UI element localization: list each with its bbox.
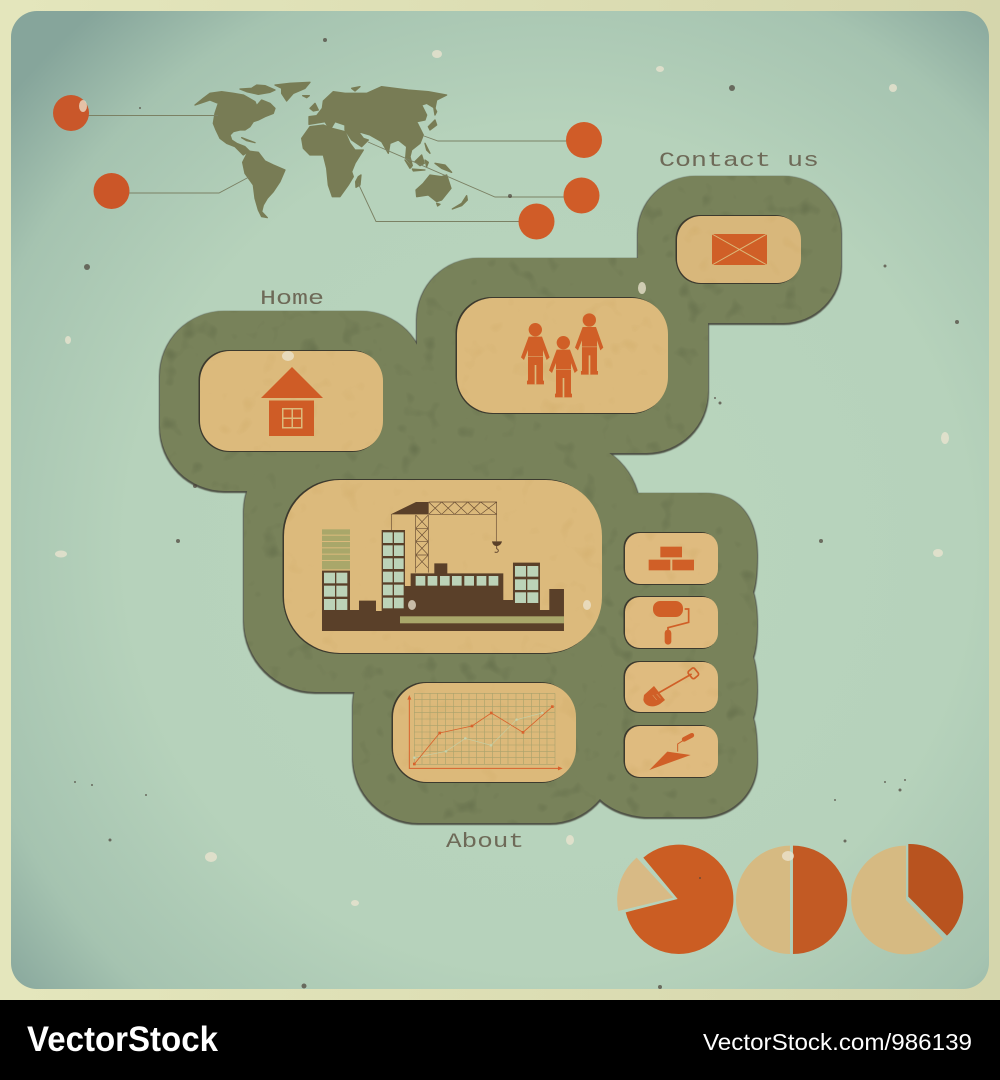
icon: trowel xyxy=(649,732,695,770)
panel: people xyxy=(457,298,668,413)
slice: cream xyxy=(617,858,673,911)
icon: paint roller xyxy=(653,601,689,645)
crane xyxy=(391,502,498,573)
slice: orange xyxy=(626,845,733,954)
map: Africa, Eurasia and Oceania xyxy=(302,87,467,209)
panel: trowel xyxy=(625,726,718,777)
icon: envelope xyxy=(712,234,767,265)
world map with callout markers xyxy=(53,82,602,239)
marker: Middle East xyxy=(564,178,600,214)
icon: bricks xyxy=(649,547,694,570)
watermark bar xyxy=(0,1000,1000,1080)
marker: East Asia xyxy=(566,122,602,158)
unfinished storeys xyxy=(322,529,350,569)
panel: paint roller xyxy=(625,597,718,648)
pie chart: one third xyxy=(851,844,963,954)
heading: About: About xyxy=(446,831,524,854)
secondary series xyxy=(413,712,543,759)
icon: shovel xyxy=(643,667,699,706)
panel: home xyxy=(200,351,383,451)
marker: North America xyxy=(53,95,89,131)
chart axes xyxy=(409,698,560,768)
watermark: image id: VectorStock.com/986139 xyxy=(703,1029,972,1055)
heading: Contact us: Contact us xyxy=(659,150,819,173)
dark specks xyxy=(74,38,959,989)
pie chart: half xyxy=(736,846,847,954)
icon: house xyxy=(261,367,323,436)
slice: orange xyxy=(793,846,847,954)
slice: cream xyxy=(736,846,790,954)
illustration: buildings and crane xyxy=(322,502,564,631)
primary series xyxy=(414,707,552,764)
marker: Madagascar xyxy=(518,204,554,240)
axis arrowheads xyxy=(407,695,563,770)
slice: orange xyxy=(908,844,963,936)
panel: construction site xyxy=(284,480,602,653)
pie chart: three quarters xyxy=(617,845,733,954)
data points xyxy=(413,705,554,765)
slice: cream xyxy=(851,846,943,954)
panel: contact xyxy=(677,216,801,283)
panel: growth chart xyxy=(393,683,576,782)
chart grid xyxy=(414,693,555,764)
watermark: brand: VectorStock xyxy=(27,1020,219,1059)
windows xyxy=(324,532,538,610)
paper specks xyxy=(55,50,949,906)
marker: South America xyxy=(94,173,130,209)
heading: Home: Home xyxy=(260,288,324,311)
building silhouette xyxy=(322,530,564,631)
panel: shovel xyxy=(625,662,718,712)
map: leader lines xyxy=(88,116,567,222)
map: Americas xyxy=(195,82,310,218)
icon: family of three xyxy=(521,313,603,397)
panel: bricks xyxy=(625,533,718,584)
line chart xyxy=(407,693,563,770)
green connected panel xyxy=(160,176,841,823)
